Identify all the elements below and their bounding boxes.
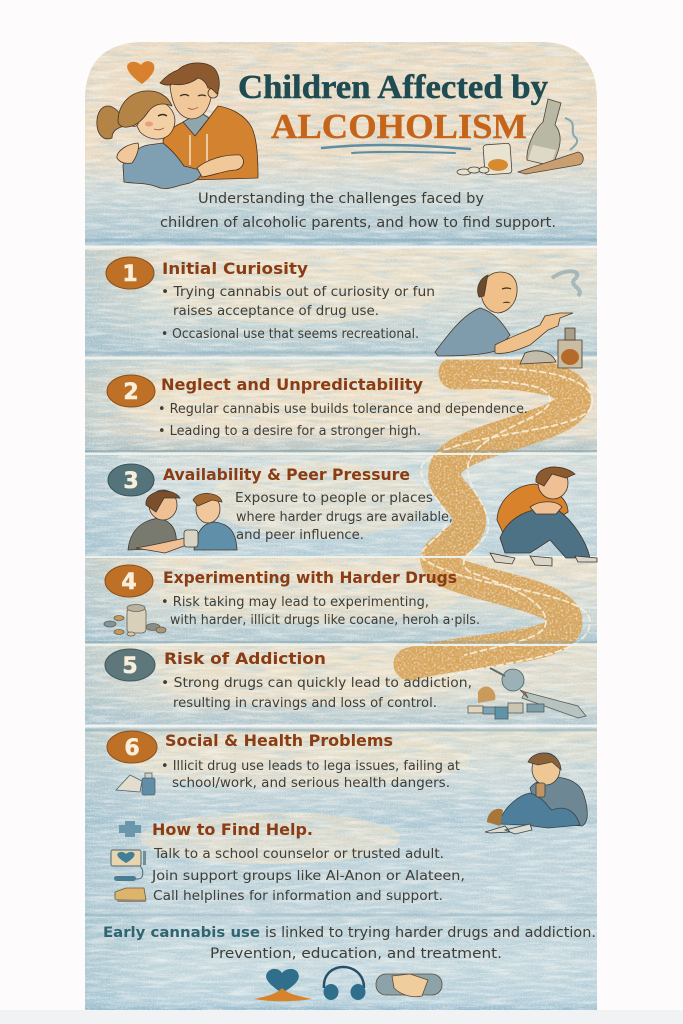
number badge 3: 3 bbox=[123, 469, 139, 494]
help list: Join support groups like Al-Anon or Alateen, bbox=[151, 869, 465, 884]
body 2: • Leading to a desire for a stronger high. bbox=[158, 424, 421, 439]
number badge 3 bbox=[108, 464, 154, 496]
icon: handshake bbox=[376, 974, 442, 997]
icon: book bbox=[115, 888, 146, 902]
body 2: • Regular cannabis use builds tolerance and dependence. bbox=[158, 402, 528, 417]
icon: medical plus bbox=[119, 821, 141, 837]
body 3: where harder drugs are available, bbox=[236, 510, 453, 525]
heart bbox=[127, 61, 154, 84]
closing message: Early cannabis use bbox=[103, 925, 260, 941]
body 6 bbox=[161, 759, 460, 791]
heading 6: Social & Health Problems bbox=[165, 731, 393, 750]
heading 2: Neglect and Unpredictability bbox=[161, 375, 424, 394]
illustration: pointing man with bottle bbox=[435, 271, 582, 368]
step 6: social and health problems bbox=[107, 731, 460, 791]
girl head bbox=[133, 101, 175, 139]
help list bbox=[151, 847, 465, 904]
step 1: initial curiosity bbox=[106, 257, 435, 342]
icon: shoe and medicine bottle bbox=[116, 773, 155, 795]
body 3: and peer influence. bbox=[236, 528, 364, 543]
number badge 2 bbox=[107, 375, 155, 407]
step 5: risk of addiction bbox=[105, 649, 472, 711]
title line 2: ALCOHOLISM bbox=[271, 107, 527, 146]
closing message: Prevention, education, and treatment. bbox=[210, 946, 502, 962]
number badge 6 bbox=[107, 731, 157, 763]
icon: heart card bbox=[111, 850, 146, 866]
girl body bbox=[123, 143, 201, 189]
illustration: sitting boy in grey hoodie bbox=[485, 753, 587, 834]
subtitle: Understanding the challenges faced by bbox=[198, 191, 484, 207]
illustration: hugging children with heart bbox=[97, 61, 258, 189]
number badge 4: 4 bbox=[121, 570, 137, 595]
body 1: raises acceptance of drug use. bbox=[173, 304, 379, 319]
body 3: Exposure to people or places bbox=[235, 491, 433, 506]
illustration: two teens talking bbox=[128, 490, 237, 553]
icon: bottle, glass and joint bbox=[457, 99, 583, 175]
body 5 bbox=[161, 676, 472, 711]
number badge 1: 1 bbox=[122, 262, 138, 287]
icon: jar and pills bbox=[104, 604, 166, 636]
number badge 2: 2 bbox=[123, 380, 139, 405]
body 5: resulting in cravings and loss of control. bbox=[173, 696, 437, 711]
icon: cable bbox=[114, 866, 143, 881]
number badge 5 bbox=[105, 649, 155, 681]
illustration: boy sitting with hoodie bbox=[490, 467, 597, 566]
help heading: How to Find Help. bbox=[152, 820, 313, 839]
body 1 bbox=[161, 285, 435, 342]
closing message: is linked to trying harder drugs and addiction. bbox=[265, 925, 596, 941]
heading 3: Availability & Peer Pressure bbox=[163, 465, 410, 484]
body 6: school/work, and serious health dangers. bbox=[172, 776, 450, 791]
help list: Call helplines for information and support. bbox=[153, 889, 443, 904]
body 5: • Strong drugs can quickly lead to addiction, bbox=[161, 676, 472, 691]
heading 1: Initial Curiosity bbox=[162, 259, 309, 278]
body 2 bbox=[158, 402, 528, 439]
icon: heart with hands bbox=[254, 969, 312, 1001]
help list: Talk to a school counselor or trusted adult. bbox=[153, 847, 444, 862]
closing message bbox=[103, 925, 596, 962]
body 4: with harder, illicit drugs like cocane, heroh a·pils. bbox=[170, 613, 480, 628]
body 1: • Occasional use that seems recreational. bbox=[161, 327, 419, 342]
heading 5: Risk of Addiction bbox=[164, 649, 326, 668]
boy hoodie bbox=[163, 106, 258, 180]
icon: headphones bbox=[324, 967, 366, 1000]
step 4: experimenting with harder drugs bbox=[105, 565, 480, 628]
number badge 6: 6 bbox=[124, 736, 140, 761]
body 4: • Risk taking may lead to experimenting, bbox=[161, 595, 429, 610]
title bbox=[238, 69, 548, 146]
body 3 bbox=[235, 491, 453, 543]
number badge 1 bbox=[106, 257, 154, 289]
subtitle: children of alcoholic parents, and how to find support. bbox=[160, 215, 556, 231]
heading 4: Experimenting with Harder Drugs bbox=[163, 568, 457, 587]
poster card background bbox=[85, 42, 597, 1010]
step 2: neglect and unpredictability bbox=[107, 375, 528, 439]
girl ponytail bbox=[97, 106, 124, 139]
icon: magnifier, blocks and syringe bbox=[468, 668, 586, 719]
hands bbox=[117, 143, 139, 163]
title flourish bbox=[322, 145, 470, 153]
number badge 5: 5 bbox=[122, 654, 138, 679]
body 4 bbox=[161, 595, 480, 628]
subtitle bbox=[160, 191, 556, 231]
number badge 4 bbox=[105, 565, 153, 597]
band dividers bbox=[85, 240, 597, 915]
body 1: • Trying cannabis out of curiosity or fun bbox=[161, 285, 435, 300]
body 6: • Illicit drug use leads to lega issues, failing at bbox=[161, 759, 460, 774]
winding golden path bbox=[410, 368, 593, 680]
sandy text glows bbox=[110, 256, 490, 864]
step 3: availability and peer pressure bbox=[108, 464, 453, 543]
boy head bbox=[170, 76, 212, 119]
how to find help bbox=[111, 820, 465, 904]
title line 1: Children Affected by bbox=[238, 69, 548, 106]
